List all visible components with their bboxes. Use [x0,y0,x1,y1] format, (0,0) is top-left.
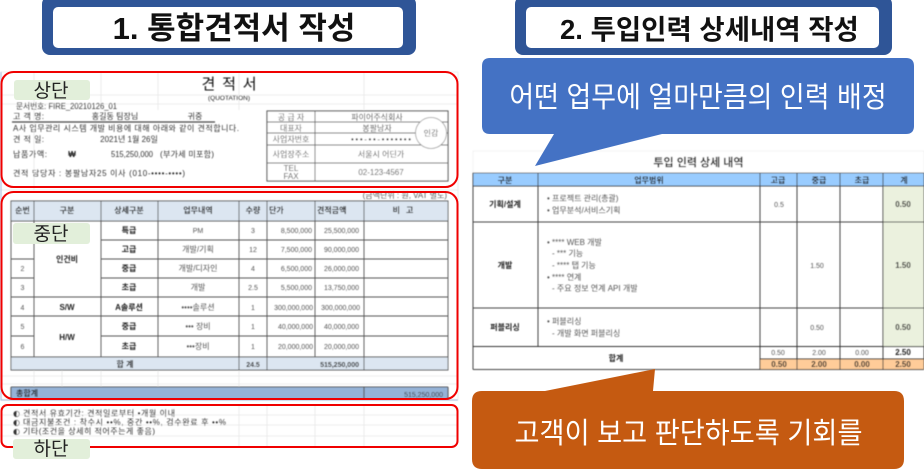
label: 하단 [13,438,90,460]
middle section: quotation table: 개발/기획 [182,244,214,254]
label: 상단 [14,80,90,102]
middle section: quotation table: S/W [59,303,75,312]
staffing table body: - *** 기능 [552,249,583,258]
top section: supplier table: 02-123-4567 [358,168,404,177]
middle section: quotation table: 개발 [191,282,206,292]
bottom section: terms: ◐ [13,409,20,418]
middle section: quotation table: 40,000,000 [278,324,313,331]
middle section: quotation table: 순번 [15,205,30,215]
middle section: quotation table: 3 [251,228,255,235]
panel: staffing detail table [473,151,924,370]
middle section: quotation table: 초급 [122,342,137,351]
callout: 고객이 보고 판단하도록 기회를 [472,369,904,469]
top section: customer information: (부가세 미포함) [160,150,214,159]
top section: customer information: 귀중 [188,111,202,121]
staffing table header [473,173,924,186]
middle section: quotation table: 1 [251,324,255,331]
top section: customer information: ₩ [68,150,76,159]
middle section: quotation table: ••••솔루션 [181,302,215,312]
top section: customer information: 홍길동 팀장님 [92,111,138,121]
middle section: quotation table: 90,000,000 [324,247,359,254]
heading: 1. 통합견적서 작성 [42,0,416,55]
middle section: quotation table: 상세구분 [114,205,144,215]
middle section: quotation table: 8,500,000 [281,228,312,235]
middle section: quotation table: 4 [251,266,255,273]
staffing table body: 0.50 [810,325,824,332]
middle section: quotation table: 단가 [269,205,284,215]
callout: 어떤 업무에 얼마만큼의 인력 배정: 어떤 업무에 얼마만큼의 인력 배정 [509,81,887,113]
middle section: quotation table: 4 [21,305,25,312]
top section: supplier table [267,111,448,181]
callout: 어떤 업무에 얼마만큼의 인력 배정 [482,58,914,166]
middle section: quotation table: 중급 [122,264,137,273]
label: 상단: 상단 [34,80,68,102]
staffing table body: 0.00 [854,360,870,369]
bottom section: terms: ◐ [13,418,20,427]
middle section: quotation table: ••• 장비 [185,321,211,331]
middle section: quotation table: 인건비 [56,254,78,264]
middle section: quotation table: 초급 [122,283,137,292]
bottom section: terms: 기타(조건을 상세히 적어주는게 좋음) [23,426,155,436]
outline: top section [2,72,458,187]
staffing table body: • 프로젝트 관리(총괄) [547,193,619,203]
outline: bottom section [2,405,458,447]
top section: customer information [12,102,239,178]
top section: customer information: 납품가액: [13,149,47,159]
staffing table body: • **** WEB 개발 [547,237,603,247]
top section: supplier table: •••-••-••••••• [351,135,411,144]
staffing table body: 0.50 [771,350,785,357]
bottom section: terms: ◐ [13,427,20,436]
top section: supplier table: 서울시 어딘가 [358,149,405,159]
middle section: quotation table: 5,500,000 [281,285,312,292]
middle section: quotation table: 수량 [246,205,261,215]
middle section: quotation table: 중급 [122,322,137,331]
middle section: quotation table [11,201,448,399]
staffing table header: 계 [900,175,908,185]
top section: customer information: 견 적 일: [13,134,44,144]
heading: 2. 투입인력 상세내역 작성: 2. 투입인력 상세내역 작성 [560,14,859,45]
staffing table body: 0.50 [895,200,911,209]
middle section: quotation table: 특급 [122,226,137,235]
middle section: quotation table: 3 [21,285,25,292]
middle section: quotation table: 26,000,000 [324,266,359,273]
stamp circle [416,118,446,148]
staffing table body: 2.50 [895,348,911,357]
staffing table body: 퍼블리싱 [490,322,520,332]
middle section: quotation table: 300,000,000 [274,305,313,312]
bottom section: terms: 견적서 유효기간: 견적일로부터 •개월 이내 [23,408,175,418]
top section: supplier table: 파이어주식회사 [351,112,403,122]
staffing table body [473,173,924,370]
middle section: quotation table: 합 계 [117,359,133,369]
top section: supplier table: 공 급 자 [278,113,305,122]
middle section: quotation table: 견적금액 [317,205,346,215]
top section: customer information: 2021년 1월 26일 [100,134,158,144]
top section: customer information: 문서번호: FIRE_20210126_01 [16,102,118,111]
label: 중단: 중단 [34,223,68,245]
staffing table body: 0.50 [771,360,787,369]
top section: supplier table: 사업자번호 [273,135,309,144]
staffing table body: 합계 [609,353,623,363]
middle section: quotation table: 5 [21,324,25,331]
middle section: quotation table: 구분 [60,206,75,215]
middle section: quotation table: 고급 [122,245,137,254]
top section: quotation title: (QUOTATION) [208,95,250,102]
middle section: quotation table: 20,000,000 [278,344,313,351]
middle section: quotation table: 2.5 [248,285,258,292]
panel: quotation sheet [0,72,458,447]
middle section: quotation table: 13,750,000 [324,285,359,292]
middle section: quotation table: 24.5 [246,362,260,369]
top section: customer information: 515,250,000 [111,150,154,159]
staffing table body: 0.00 [855,350,869,357]
middle section: quotation table: A솔루션 [115,302,143,312]
middle section: quotation table: 1 [251,305,255,312]
middle section: quotation table: 40,000,000 [324,324,359,331]
staffing table header: 업무범위 [634,175,664,185]
staffing table body: - 개발 화면 퍼블리싱 [552,328,620,338]
callout: 고객이 보고 판단하도록 기회를: 고객이 보고 판단하도록 기회를 [515,417,862,449]
heading: 1. 통합견적서 작성: 1. 통합견적서 작성 [113,11,355,46]
top section: supplier table: TEL [284,164,299,173]
middle section: quotation table: 20,000,000 [324,344,359,351]
staffing table header: 중급 [812,176,827,185]
staffing table body: 2.00 [812,350,826,357]
middle section: quotation table: 25,500,000 [324,228,359,235]
staffing table body: 0.50 [895,323,911,332]
top section: customer information: 견적 담당자 : 봉팔남자25 이사 (010-••••-••••) [13,168,185,178]
middle section: quotation table: 6,500,000 [281,266,312,273]
middle section: quotation table: 300,000,000 [321,305,360,312]
top section: customer information: A사 업무관리 시스템 개발 비용에 대해 아래와 같이 견적합니다. [13,123,239,133]
middle section: quotation table: 개발/디자인 [178,263,218,273]
middle section: quotation table: 1 [251,344,255,351]
outline: middle section [2,192,458,399]
staffing table body: 2.00 [811,360,827,369]
staffing table header: 고급 [771,176,786,185]
middle section: quotation table: 12 [249,247,257,254]
middle section: quotation table: 7,500,000 [281,247,312,254]
stamp circle: 인감 [424,128,439,138]
heading: 2. 투입인력 상세내역 작성 [515,0,892,55]
label: 중단 [13,223,90,245]
staffing table body: 2.50 [895,360,911,369]
staffing table body: • **** 연계 [547,272,581,282]
middle section: quotation table: 2 [21,266,25,273]
unit note: (금액단위 : 원, VAT 별도) [363,190,447,200]
top section: quotation title: 견 적 서 [202,76,256,93]
staffing table header: 구분 [498,176,513,185]
staffing table header: 초급 [855,176,870,185]
middle section: quotation table: PM [193,228,203,235]
top section: supplier table: 대표자 [280,124,303,133]
middle section: quotation table: H/W [59,333,75,342]
top section: quotation title [202,76,256,102]
top section: supplier table: 봉팔남자 [362,123,392,133]
staffing table body: • 퍼블리싱 [547,316,581,326]
middle section: quotation table: •••장비 [186,341,210,351]
staffing table body: • 업무분석/서비스기획 [547,205,620,215]
middle section: quotation table: 515,250,000 [320,362,359,369]
staffing table body: 0.5 [774,202,784,209]
middle section: quotation table: 업무내역 [183,205,213,215]
staffing table body: - **** 탭 기능 [552,260,596,270]
top section: customer information: 고 객 명: [13,111,44,121]
top section: supplier table: 사업장주소 [273,149,309,159]
staffing table title: 투입 인력 상세 내역 [653,155,744,169]
staffing table title [473,151,924,173]
staffing table body: 1.50 [895,261,911,270]
label: 하단: 하단 [34,438,68,460]
middle section: quotation table: 515,250,000 [404,392,443,399]
staffing table body: 기획/설계 [489,199,521,209]
staffing table body: 1.50 [810,263,824,270]
bottom section: terms [13,408,226,436]
middle section: quotation table: 6 [21,344,25,351]
middle section: quotation table: 비고 [393,205,419,215]
bottom section: terms: 대금지불조건 : 착수시 ••%, 중간 ••%, 검수완료 후 ••% [23,417,226,427]
staffing table body: 개발 [498,260,513,270]
staffing table body: - 주요 정보 연계 API 개발 [552,283,638,293]
middle section: quotation table: 총합계 [16,388,38,398]
top section: supplier table: FAX [283,172,299,181]
